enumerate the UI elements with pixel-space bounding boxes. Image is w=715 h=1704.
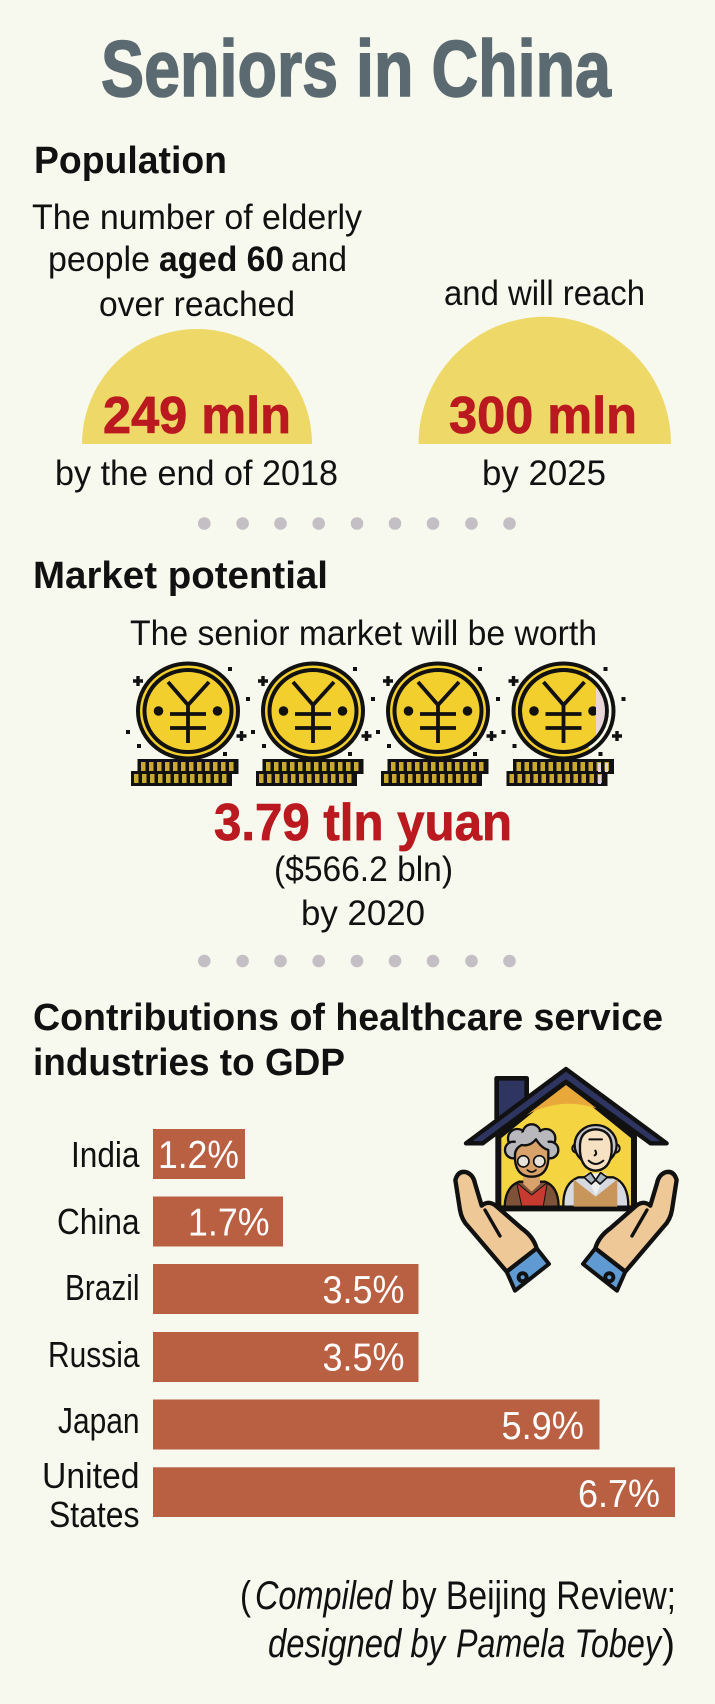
icon: yuan coin 3: [376, 664, 500, 786]
woman: [505, 1124, 559, 1207]
text block: credits: (: [240, 1574, 252, 1618]
text block: elderly intro: and: [291, 240, 347, 279]
heading: contributions: Contributions of healthcare service: [33, 997, 663, 1039]
text block: credits: Compiled: [255, 1574, 393, 1618]
text: and will reach: and will reach: [444, 274, 645, 313]
panel: population: [32, 140, 671, 493]
value: 249 mln: 249 mln: [103, 387, 291, 445]
text: by 2025: by 2025: [482, 454, 606, 493]
bar: Brazil: [65, 1264, 418, 1314]
bar: India: [71, 1129, 245, 1179]
semicircle: 2025: [418, 317, 671, 444]
text block: credits: Pamela Tobey: [456, 1622, 663, 1666]
bar: Brazil: 3.5%: [322, 1269, 404, 1312]
text block: elderly intro: [32, 198, 362, 324]
value: 300 mln: 300 mln: [449, 387, 637, 445]
icon: yuan coin 2: [251, 664, 375, 786]
bar: India: 1.2%: [158, 1134, 239, 1177]
icon: yuan coin 1: [126, 664, 250, 786]
text block: elderly intro: aged 60: [159, 240, 284, 279]
text block: credits: designed by: [268, 1622, 447, 1666]
bar: Brazil: Brazil: [65, 1267, 140, 1308]
bar: China: [57, 1196, 283, 1246]
bar: United States: 6.7%: [578, 1473, 660, 1516]
semicircle: 2018: [82, 329, 312, 444]
icon: yuan coin 4: [502, 664, 626, 786]
heading: market potential: Market potential: [33, 555, 328, 597]
bar: United States: United: [42, 1455, 140, 1496]
text block: credits: ): [662, 1622, 675, 1666]
panel: market potential: [33, 555, 626, 933]
text block: elderly intro: The number of elderly: [32, 198, 362, 237]
text block: elderly intro: over reached: [99, 285, 295, 324]
bar: Japan: [58, 1400, 600, 1450]
heading: contributions: industries to GDP: [33, 1042, 345, 1084]
icon: house with seniors held in hands: [455, 1069, 677, 1291]
bar: United States: [42, 1455, 675, 1535]
bar: Russia: 3.5%: [322, 1336, 404, 1380]
bar: Russia: [48, 1332, 418, 1382]
heading: contributions: [33, 997, 663, 1084]
text: by 2020: by 2020: [301, 894, 425, 933]
bar: Russia: Russia: [48, 1334, 140, 1375]
bar: Japan: 5.9%: [502, 1405, 584, 1448]
man: [563, 1125, 628, 1207]
hands: [455, 1172, 549, 1291]
bar chart: GDP contributions: [42, 1129, 675, 1535]
value: 3.79 tln yuan: 3.79 tln yuan: [214, 794, 512, 852]
heading: population: Population: [34, 140, 227, 182]
text: dollar value: ($566.2 bln): [274, 850, 453, 889]
text block: elderly intro: people: [48, 240, 150, 279]
text block: credits: [240, 1574, 676, 1666]
bar: China: 1.7%: [188, 1202, 270, 1244]
title: Seniors in China: [101, 24, 611, 113]
text: senior market: The senior market will be worth: [130, 614, 597, 653]
bar: India: India: [71, 1134, 140, 1175]
bar: China: China: [57, 1201, 140, 1242]
bar: Japan: Japan: [58, 1400, 140, 1441]
text: by the end of 2018: by the end of 2018: [55, 454, 338, 493]
roof: [466, 1069, 667, 1143]
bar: United States: States: [49, 1494, 140, 1535]
